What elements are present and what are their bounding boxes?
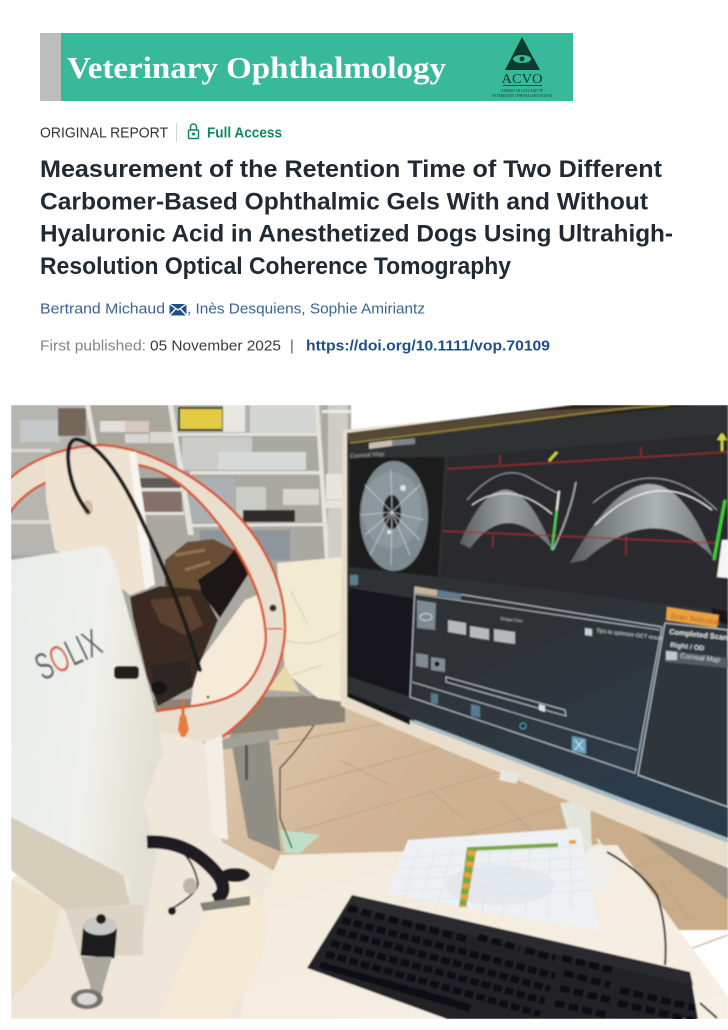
photo: dog examined with OCT device beside monitor bbox=[8, 405, 728, 1021]
exam table top bbox=[150, 695, 345, 735]
device base panel bbox=[11, 730, 290, 1019]
left cornea section bbox=[460, 490, 553, 550]
monitor stand bbox=[560, 800, 616, 892]
publication date and DOI bbox=[40, 338, 550, 354]
black cable bbox=[68, 439, 200, 670]
dog head bbox=[130, 539, 251, 706]
icon: ACVO logo: AMERICAN COLLEGE OF bbox=[501, 89, 543, 93]
scanner head with SOLIX label: SOLIX bbox=[29, 622, 108, 689]
publication date and DOI: First published: bbox=[40, 338, 146, 354]
icon: ACVO logo: VETERINARY OPHTHALMOLOGISTS bbox=[492, 94, 552, 98]
screen: corneal map: Corneal Map bbox=[350, 452, 385, 460]
article type and access row: ORIGINAL REPORT bbox=[40, 126, 168, 142]
paper grid sheet bbox=[387, 828, 600, 932]
grey monitor shadow wedge bbox=[640, 833, 728, 900]
shelving background bbox=[11, 405, 352, 725]
green depth markers bbox=[552, 491, 559, 550]
authors: Bertrand Michaud bbox=[40, 302, 165, 318]
article title: Carbomer-Based Ophthalmic Gels With and Without bbox=[40, 188, 648, 216]
screen: control panel: Tips to optimize OCT results bbox=[596, 628, 665, 642]
screen: scan selection panel: Scan Selection bbox=[670, 611, 721, 627]
screen: control panel: Shape Disc bbox=[500, 616, 524, 623]
screen: control panel bbox=[410, 587, 665, 773]
publication date and DOI: | bbox=[290, 338, 294, 354]
journal name: Veterinary Ophthalmology bbox=[67, 50, 447, 85]
device arm bbox=[45, 451, 155, 595]
publication date and DOI: 05 November 2025 bbox=[150, 338, 281, 354]
red tag on cord bbox=[177, 699, 190, 738]
icon: ACVO logo: ACVO bbox=[502, 72, 542, 87]
publication date and DOI: https://doi.org/10.1111/vop.70109 bbox=[306, 338, 550, 354]
screen: OCT scan panel bbox=[440, 432, 728, 612]
keyboard bbox=[307, 895, 698, 1021]
joystick bbox=[71, 914, 117, 1009]
article title: Hyaluronic Acid in Anesthetized Dogs Using Ultrahigh- bbox=[40, 220, 673, 248]
yellow arrows bbox=[549, 435, 722, 461]
screen: scan selection panel bbox=[638, 607, 728, 807]
screen: scan selection panel: Right / OD bbox=[670, 642, 705, 653]
article title bbox=[40, 156, 673, 280]
blanket under dog bbox=[190, 557, 343, 712]
dog ear bbox=[198, 544, 251, 618]
authors: , Inès Desquiens, Sophie Amiriantz bbox=[187, 302, 425, 318]
icon: envelope bbox=[170, 304, 186, 316]
article title: Resolution Optical Coherence Tomography bbox=[40, 253, 512, 280]
scanner head with SOLIX label bbox=[11, 546, 163, 1000]
article title: Measurement of the Retention Time of Two Different bbox=[40, 156, 662, 183]
chin rest cables bbox=[147, 838, 250, 915]
screen: corneal map bbox=[349, 452, 445, 577]
icon: ACVO logo bbox=[492, 37, 552, 98]
icon: open lock bbox=[188, 124, 198, 138]
article type and access row bbox=[40, 123, 282, 142]
table surface bbox=[240, 844, 728, 1019]
orange ring frame bbox=[8, 445, 285, 745]
authors bbox=[40, 302, 425, 318]
journal banner bbox=[40, 33, 573, 101]
monitor bbox=[340, 405, 728, 868]
article type and access row: Full Access bbox=[207, 126, 282, 142]
table leg bbox=[212, 722, 320, 853]
right cornea section bbox=[570, 484, 713, 563]
black cables to monitor bbox=[607, 852, 717, 1018]
screen: lower-left dark pane bbox=[347, 588, 413, 697]
floor bbox=[215, 700, 728, 960]
screen: scan selection panel: Corneal Map bbox=[680, 653, 720, 664]
